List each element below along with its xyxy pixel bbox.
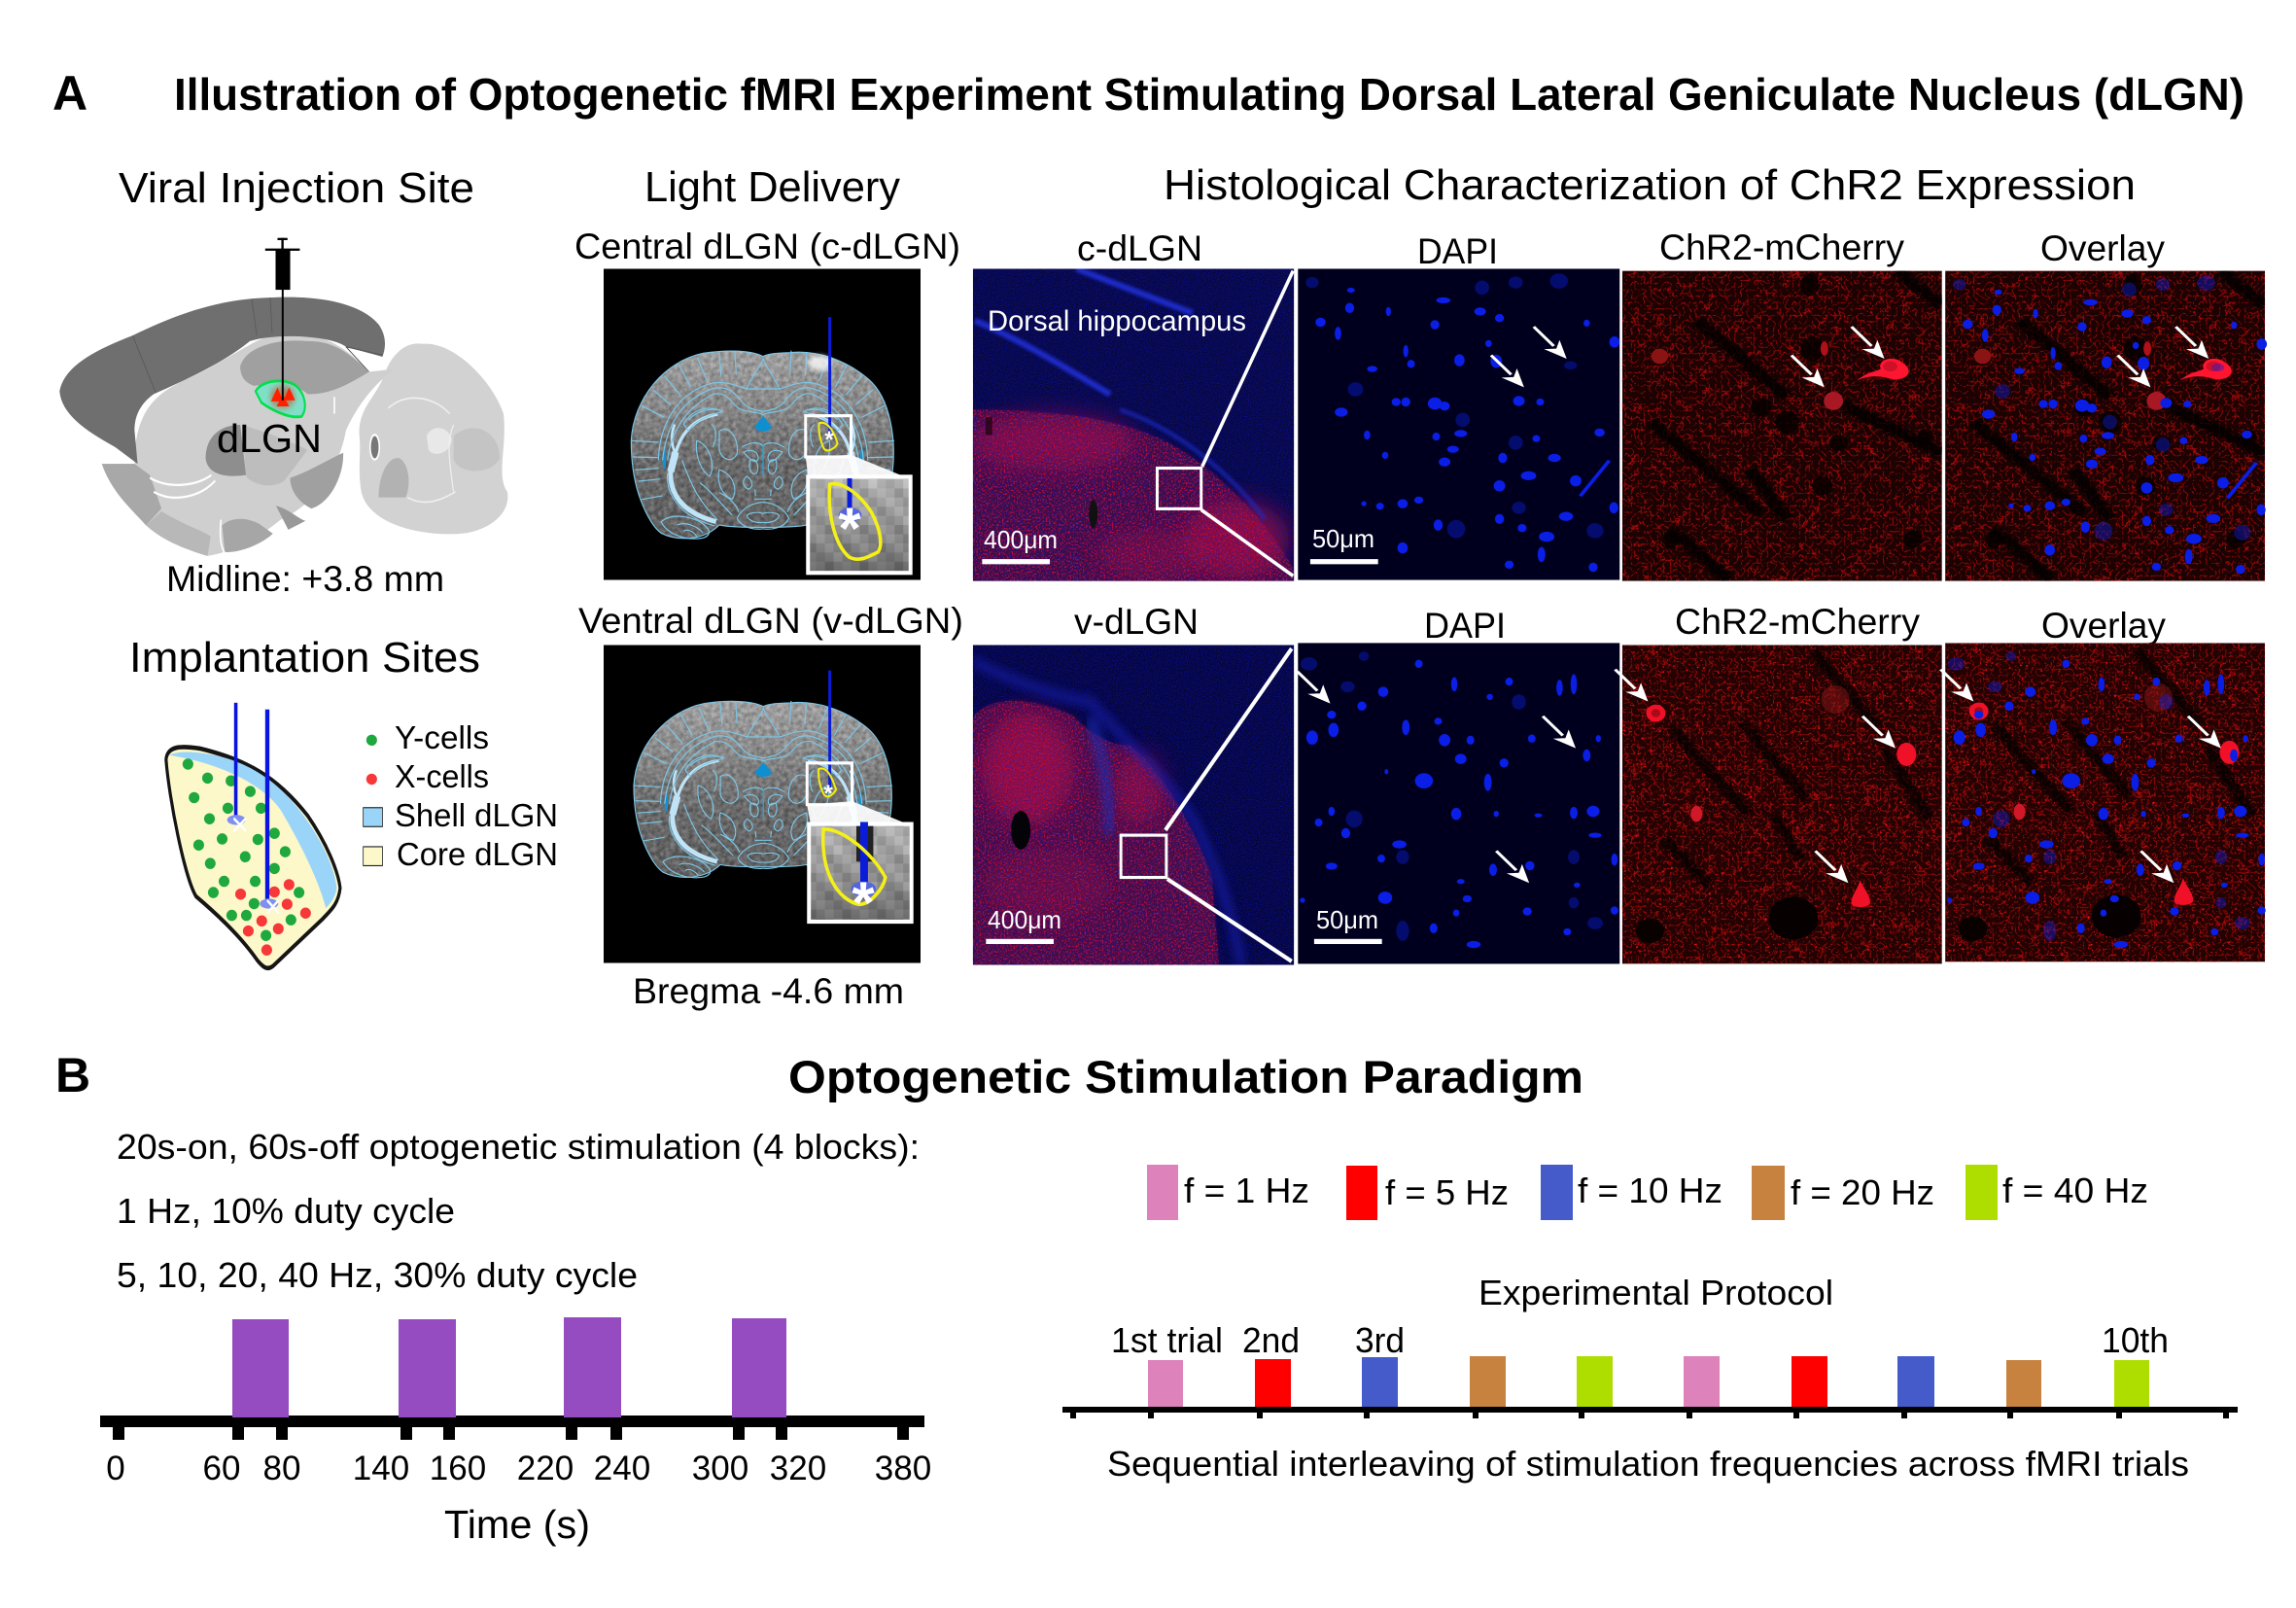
small inset box	[806, 416, 852, 457]
panel: v-dLGN histology	[973, 646, 1294, 964]
panel label A: A	[52, 66, 87, 121]
asterisk: fiber tip small: *	[823, 781, 833, 807]
tick labels: 60	[203, 1450, 240, 1487]
shell dLGN band	[169, 752, 336, 908]
column label: c-dLGN: c-dLGN	[1077, 228, 1202, 268]
panel label B: B	[55, 1048, 90, 1102]
legend item: 20 Hz	[1752, 1166, 1934, 1220]
legend: core dLGN: Core dLGN	[397, 836, 558, 872]
tick labels: 300	[692, 1450, 748, 1487]
panel: overlay c-dLGN	[1945, 271, 2267, 581]
optical fibers	[227, 703, 279, 913]
tick labels: 160	[430, 1450, 486, 1487]
scale bar	[982, 559, 1050, 564]
heading: experimental protocol: Experimental Protocol	[1478, 1273, 1833, 1312]
column label: ChR2-mCherry row 2: ChR2-mCherry	[1675, 602, 1920, 642]
tick labels: 0	[106, 1450, 125, 1487]
core dLGN shape	[166, 747, 340, 968]
trial labels: 2nd	[1242, 1320, 1300, 1360]
trial labels: 10th	[2102, 1320, 2169, 1360]
axis	[1062, 1407, 2238, 1413]
trial labels: 3rd	[1355, 1320, 1405, 1360]
axis	[100, 1416, 924, 1427]
magnified inset	[809, 822, 912, 922]
axis ticks	[1070, 1411, 2229, 1418]
coronal brain atlas	[634, 701, 892, 878]
scale label: 400um: 400μm	[984, 525, 1058, 554]
panel: ventral light delivery MRI	[604, 646, 921, 962]
panel: ChR2-mCherry v-dLGN	[1616, 646, 1942, 963]
panel: DAPI c-dLGN	[1298, 268, 1619, 580]
panel: ChR2-mCherry c-dLGN	[1622, 271, 1942, 581]
column label: Overlay: Overlay	[2040, 228, 2165, 268]
subcortical regions	[102, 332, 394, 556]
legend item: 20 Hz: f = 20 Hz	[1791, 1172, 1934, 1212]
tick labels: 220	[517, 1450, 574, 1487]
panel: DAPI v-dLGN	[1298, 643, 1619, 963]
column label: Overlay row 2: Overlay	[2041, 606, 2166, 646]
text: stimulation description	[117, 1127, 920, 1295]
tick labels: 320	[770, 1450, 826, 1487]
coronal brain atlas	[631, 351, 894, 539]
legend: X-cells: X-cells	[395, 758, 489, 794]
cerebellum	[360, 343, 507, 534]
asterisk: fiber tip small: *	[824, 427, 834, 453]
column label: DAPI: DAPI	[1417, 231, 1498, 271]
heading: light delivery: Light Delivery	[644, 163, 900, 211]
diagram: dLGN implantation map	[166, 703, 382, 968]
line: other frequencies: 5, 10, 20, 40 Hz, 30% duty cycle	[117, 1255, 638, 1295]
caption: sequential interleaving: Sequential interleaving of stimulation frequencies across fMRI trials	[1107, 1444, 2189, 1484]
legend: stimulation frequencies	[1147, 1165, 2148, 1220]
asterisk: fiber tip: *	[838, 496, 861, 561]
panels: confocal images	[1298, 268, 2267, 963]
legend item: 1 Hz: f = 1 Hz	[1184, 1171, 1309, 1210]
column label: v-dLGN: v-dLGN	[1074, 602, 1199, 642]
line: block design: 20s-on, 60s-off optogenetic stimulation (4 blocks):	[117, 1127, 920, 1167]
asterisk: fiber tip: *	[852, 870, 875, 935]
label: ventral dLGN: Ventral dLGN (v-dLGN)	[578, 601, 963, 641]
optical fiber	[828, 671, 831, 787]
legend item: 5 Hz	[1346, 1166, 1509, 1220]
chart: stimulation timeline	[100, 1317, 931, 1547]
inset marker and zoom lines	[1121, 648, 1292, 961]
tick labels: 140	[353, 1450, 409, 1487]
heading: histological characterization: Histological Characterization of ChR2 Expression	[1164, 161, 2136, 209]
small inset box	[807, 763, 852, 805]
legend item: 1 Hz	[1147, 1165, 1309, 1220]
stimulation blocks	[232, 1317, 786, 1417]
legend swatches	[364, 735, 382, 865]
magnified inset	[808, 476, 911, 573]
Y-cells dots	[183, 758, 304, 941]
injection site: dLGN expression	[256, 381, 305, 417]
trial labels	[1111, 1320, 2169, 1360]
annotation: dorsal hippocampus: Dorsal hippocampus	[988, 305, 1246, 337]
column label: ChR2-mCherry: ChR2-mCherry	[1659, 227, 1904, 267]
heading: implantation sites: Implantation Sites	[129, 634, 480, 682]
panel: c-dLGN histology	[970, 268, 1294, 581]
scale label: 400um: 400μm	[988, 905, 1061, 934]
hippocampus	[240, 340, 369, 394]
legend item: 5 Hz: f = 5 Hz	[1385, 1172, 1509, 1212]
scale label: 50um: 50μm	[1312, 524, 1374, 553]
label: dLGN: dLGN	[217, 416, 322, 461]
legend labels	[395, 719, 558, 872]
panel: overlay v-dLGN	[1940, 643, 2266, 961]
legend item: 40 Hz: f = 40 Hz	[2002, 1171, 2148, 1210]
title: panel B: Optogenetic Stimulation Paradigm	[788, 1051, 1583, 1102]
icon: syringe	[265, 238, 299, 401]
inset marker and zoom lines	[1157, 271, 1293, 576]
tick labels: 380	[875, 1450, 931, 1487]
chart: trial sequence	[1062, 1320, 2238, 1418]
legend item: 10 Hz: f = 10 Hz	[1578, 1171, 1722, 1210]
label: central dLGN: Central dLGN (c-dLGN)	[574, 227, 960, 266]
legend item: 40 Hz	[1966, 1165, 2148, 1220]
tick labels: 80	[263, 1450, 300, 1487]
tick labels	[106, 1450, 931, 1487]
trial labels: 1st trial	[1111, 1320, 1223, 1360]
heading: viral injection site: Viral Injection Site	[119, 164, 474, 212]
legend item: 10 Hz	[1541, 1165, 1722, 1220]
scale bar	[986, 939, 1054, 944]
diagram: sagittal brain with injection	[59, 238, 507, 556]
trial bars	[1148, 1356, 2149, 1408]
line: 1 Hz: 1 Hz, 10% duty cycle	[117, 1191, 455, 1231]
column label: DAPI row 2: DAPI	[1424, 606, 1506, 646]
tick labels: 240	[594, 1450, 650, 1487]
legend: shell dLGN: Shell dLGN	[395, 797, 558, 833]
caption: midline coordinate: Midline: +3.8 mm	[166, 559, 444, 599]
legend: Y-cells: Y-cells	[395, 719, 489, 755]
scale label: 50um row 2: 50μm	[1316, 905, 1378, 934]
optical fiber	[828, 317, 831, 434]
X-cells dots	[235, 879, 311, 956]
panel: central light delivery MRI	[604, 268, 921, 579]
title: panel A: Illustration of Optogenetic fMRI Experiment Stimulating Dorsal Lateral Geniculate Nucleus (dLGN)	[174, 69, 2244, 120]
axis ticks	[113, 1425, 909, 1440]
cortex	[59, 297, 385, 464]
axis title: Time (s)	[444, 1502, 590, 1547]
caption: bregma coordinate: Bregma -4.6 mm	[633, 971, 904, 1011]
